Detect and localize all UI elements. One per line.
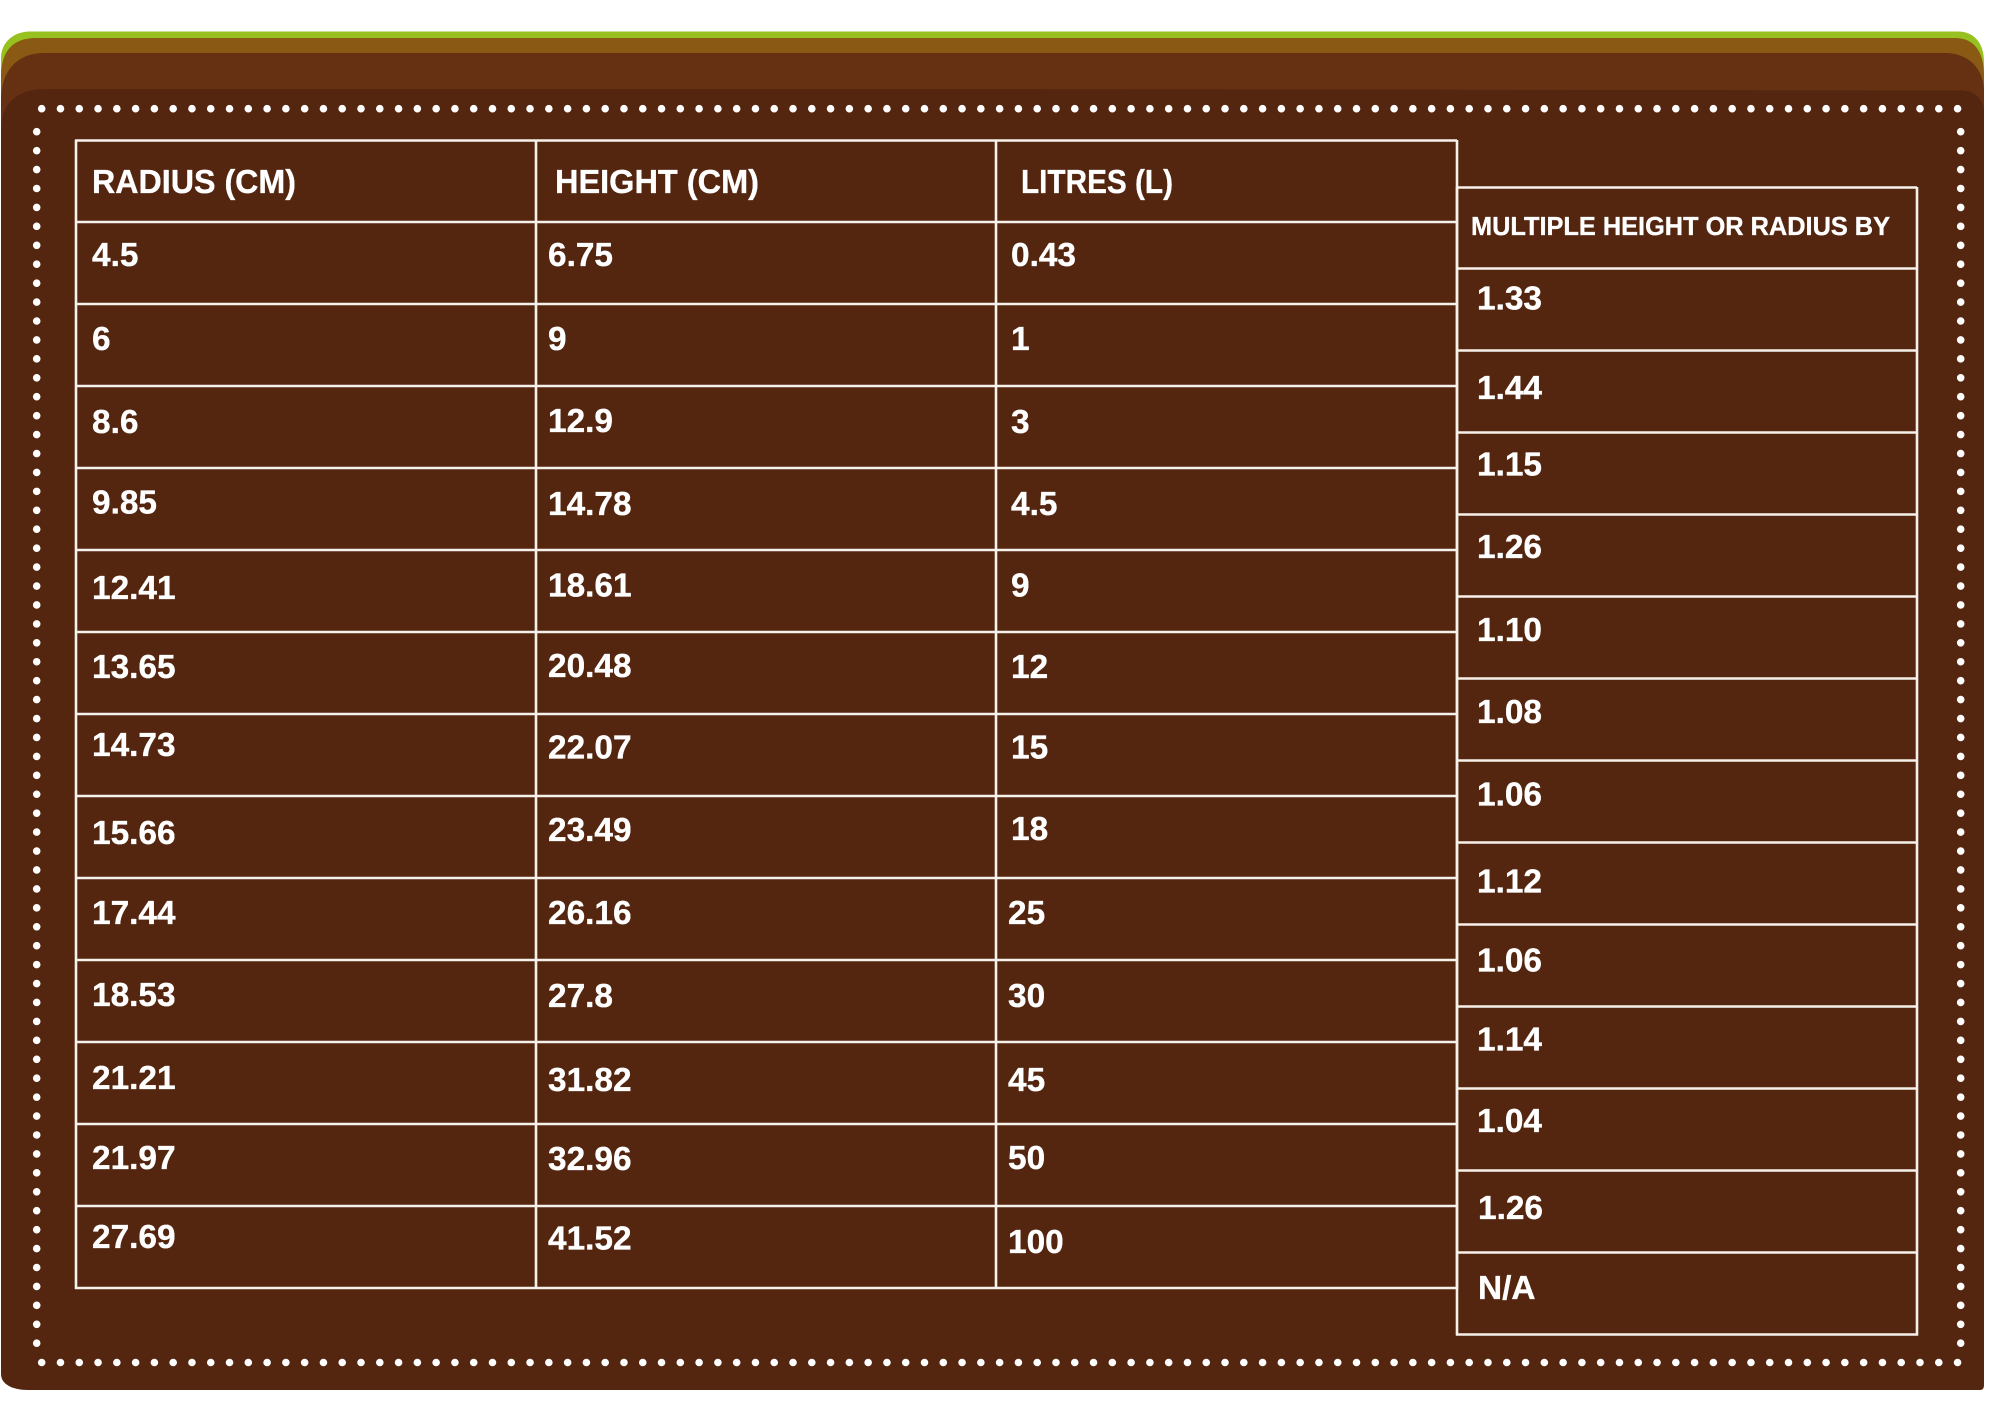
main table: radius, height, litres [75, 140, 1457, 1289]
row: 12 litres [92, 648, 1048, 686]
row: 12 litres: 12 [1011, 649, 1048, 686]
row: 4.5 litres: 9.85 [92, 484, 157, 522]
row: 18 litres [92, 811, 1048, 852]
row: 45 litres: 21.21 [92, 1060, 176, 1097]
multiplier values: 1.33 [1477, 280, 1542, 318]
row: 100 litres: 27.69 [92, 1219, 176, 1256]
row: 100 litres: 100 [1008, 1224, 1064, 1261]
row: 4.5 litres: 4.5 [1011, 486, 1057, 523]
row: 50 litres: 32.96 [548, 1141, 632, 1178]
row: 25 litres: 25 [1008, 895, 1045, 932]
multiplier values [1477, 280, 1543, 1307]
row: 1 litre: 6 [92, 321, 111, 358]
row: 100 litres [92, 1219, 1064, 1261]
multiplier values: 1.04 [1477, 1103, 1542, 1140]
row: 3 litres: 3 [1011, 404, 1030, 441]
row: 50 litres: 50 [1008, 1140, 1045, 1177]
row: 9 litres: 12.41 [92, 570, 176, 607]
row: 12 litres: 20.48 [548, 648, 632, 685]
multiplier values: 1.26 [1478, 1190, 1543, 1227]
row: 25 litres: 26.16 [548, 895, 632, 932]
row: 4.5 litres [92, 484, 1057, 523]
row: 50 litres: 21.97 [92, 1140, 176, 1177]
multiplier values: 1.10 [1477, 612, 1542, 649]
row: 45 litres: 45 [1008, 1062, 1045, 1099]
multiplier values: 1.06 [1477, 776, 1542, 814]
row: 25 litres [92, 895, 1045, 932]
row: 3 litres: 12.9 [548, 403, 613, 440]
row: 15 litres: 15 [1011, 730, 1048, 766]
row: 50 litres [92, 1140, 1045, 1178]
row: 30 litres: 18.53 [92, 977, 176, 1014]
row: 9 litres [92, 568, 1030, 607]
row: 9 litres: 18.61 [548, 568, 632, 604]
row: 1 litre: 1 [1011, 321, 1030, 358]
row: 45 litres [92, 1060, 1045, 1099]
main table grid [75, 140, 1457, 1289]
row: 0.43 litres [92, 237, 1076, 274]
row: 1 litre: 9 [548, 321, 567, 358]
row: 15 litres: 22.07 [548, 730, 632, 766]
row: 15 litres: 14.73 [92, 727, 176, 764]
row: 18 litres: 15.66 [92, 815, 176, 852]
row: 3 litres: 8.6 [92, 404, 138, 441]
multiplier values: 1.15 [1477, 446, 1542, 484]
row: 18 litres: 23.49 [548, 812, 632, 849]
row: 0.43 litres: 0.43 [1011, 237, 1076, 274]
side table header: MULTIPLE HEIGHT OR RADIUS BY [1471, 211, 1890, 241]
row: 0.43 litres: 6.75 [548, 237, 613, 274]
multiplier values: 1.08 [1477, 694, 1542, 731]
row: 18 litres: 18 [1011, 811, 1048, 848]
row: 30 litres: 27.8 [548, 978, 613, 1015]
multiplier values: N/A [1478, 1270, 1536, 1307]
multiplier values: 1.14 [1477, 1022, 1542, 1058]
row: 25 litres: 17.44 [92, 895, 176, 932]
multiplier values: 1.06 [1477, 942, 1542, 980]
multiplier values: 1.12 [1477, 864, 1542, 900]
row: 12 litres: 13.65 [92, 649, 176, 686]
row: 4.5 litres: 14.78 [548, 486, 632, 523]
header row: HEIGHT (CM) [555, 164, 759, 201]
header row: LITRES (L) [1021, 164, 1173, 201]
row: 15 litres [92, 727, 1048, 766]
header row [92, 164, 1173, 201]
row: 45 litres: 31.82 [548, 1062, 632, 1099]
row: 100 litres: 41.52 [548, 1220, 632, 1258]
header row: RADIUS (CM) [92, 164, 296, 201]
row: 30 litres [92, 977, 1045, 1015]
side table grid [1456, 187, 1918, 1336]
row: 9 litres: 9 [1011, 568, 1030, 604]
multiplier values: 1.26 [1477, 529, 1542, 566]
row: 0.43 litres: 4.5 [92, 237, 138, 274]
row: 3 litres [92, 403, 1030, 441]
multiplier values: 1.44 [1477, 370, 1542, 407]
row: 30 litres: 30 [1008, 978, 1045, 1015]
row: 1 litre [92, 321, 1030, 358]
side table: multiplier [1456, 187, 1918, 1336]
